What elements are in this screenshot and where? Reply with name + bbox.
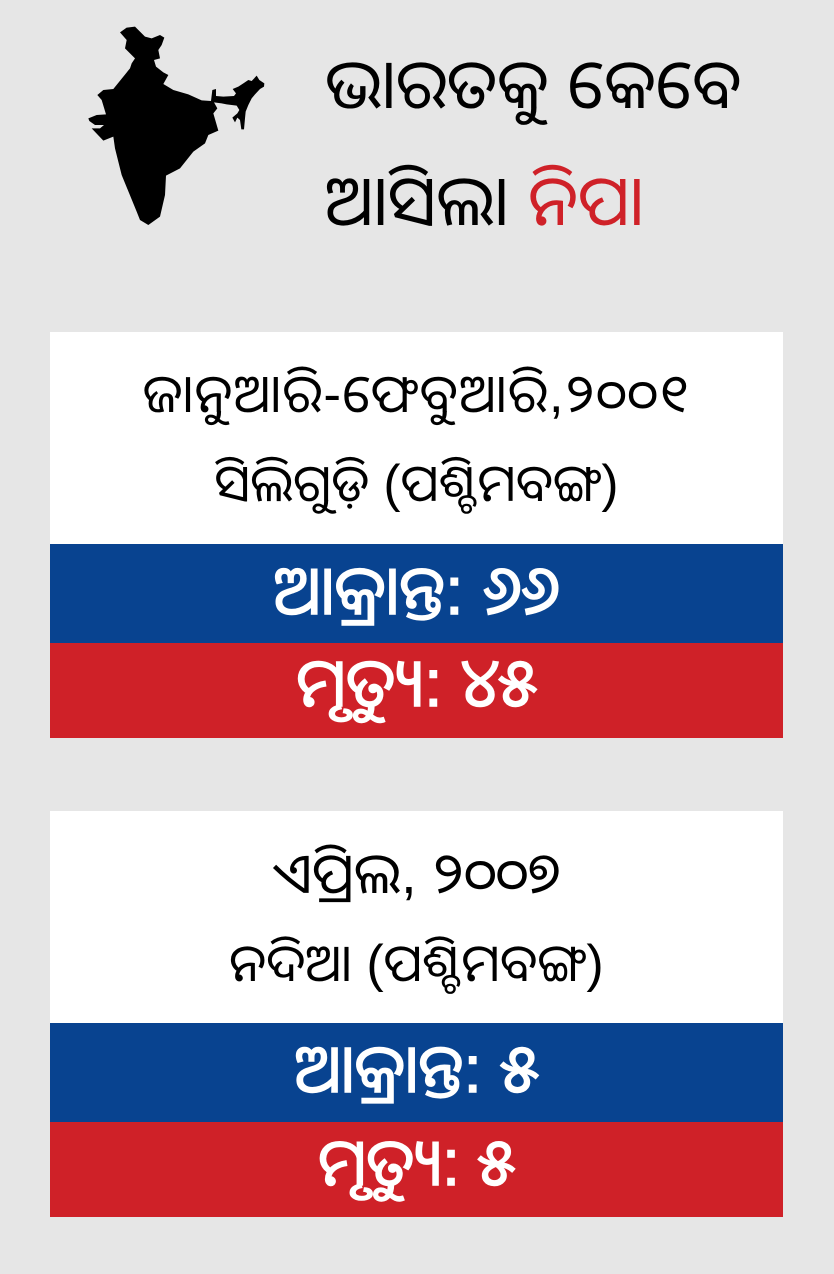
- deaths count 2001: [50, 643, 783, 738]
- date and place 2001: [50, 332, 783, 544]
- title: [325, 46, 741, 240]
- date and place 2007: ନଦିଆ (ପଶ୍ଚିମବଙ୍ଗ): [229, 935, 604, 993]
- affected count 2007: [50, 1023, 783, 1122]
- deaths count 2001: ମୃତ୍ୟୁ: ୪୫: [296, 646, 537, 721]
- date and place 2007: ଏପ୍ରିଲ, ୨୦୦୭: [273, 842, 560, 905]
- deaths count 2007: ମୃତ୍ୟୁ: ୫: [318, 1126, 515, 1199]
- icon: India map silhouette: [88, 26, 264, 225]
- affected count 2001: [50, 544, 783, 643]
- title: ଆସିଲା ନିପା: [325, 162, 644, 240]
- deaths count 2007: [50, 1122, 783, 1217]
- title: ଭାରତକୁ କେବେ: [325, 46, 741, 123]
- panel: 2007 outbreak: [50, 811, 783, 1217]
- affected count 2007: ଆକ୍ରାନ୍ତ: ୫: [295, 1032, 538, 1107]
- affected count 2001: ଆକ୍ରାନ୍ତ: ୬୬: [274, 553, 559, 629]
- date and place 2007: [50, 811, 783, 1023]
- date and place 2001: ସିଲିଗୁଡ଼ି (ପଶ୍ଚିମବଙ୍ଗ): [214, 454, 619, 512]
- panel: 2001 outbreak: [50, 332, 783, 738]
- date and place 2001: ଜାନୁଆରି-ଫେବୁଆରି,୨୦୦୧: [143, 365, 690, 424]
